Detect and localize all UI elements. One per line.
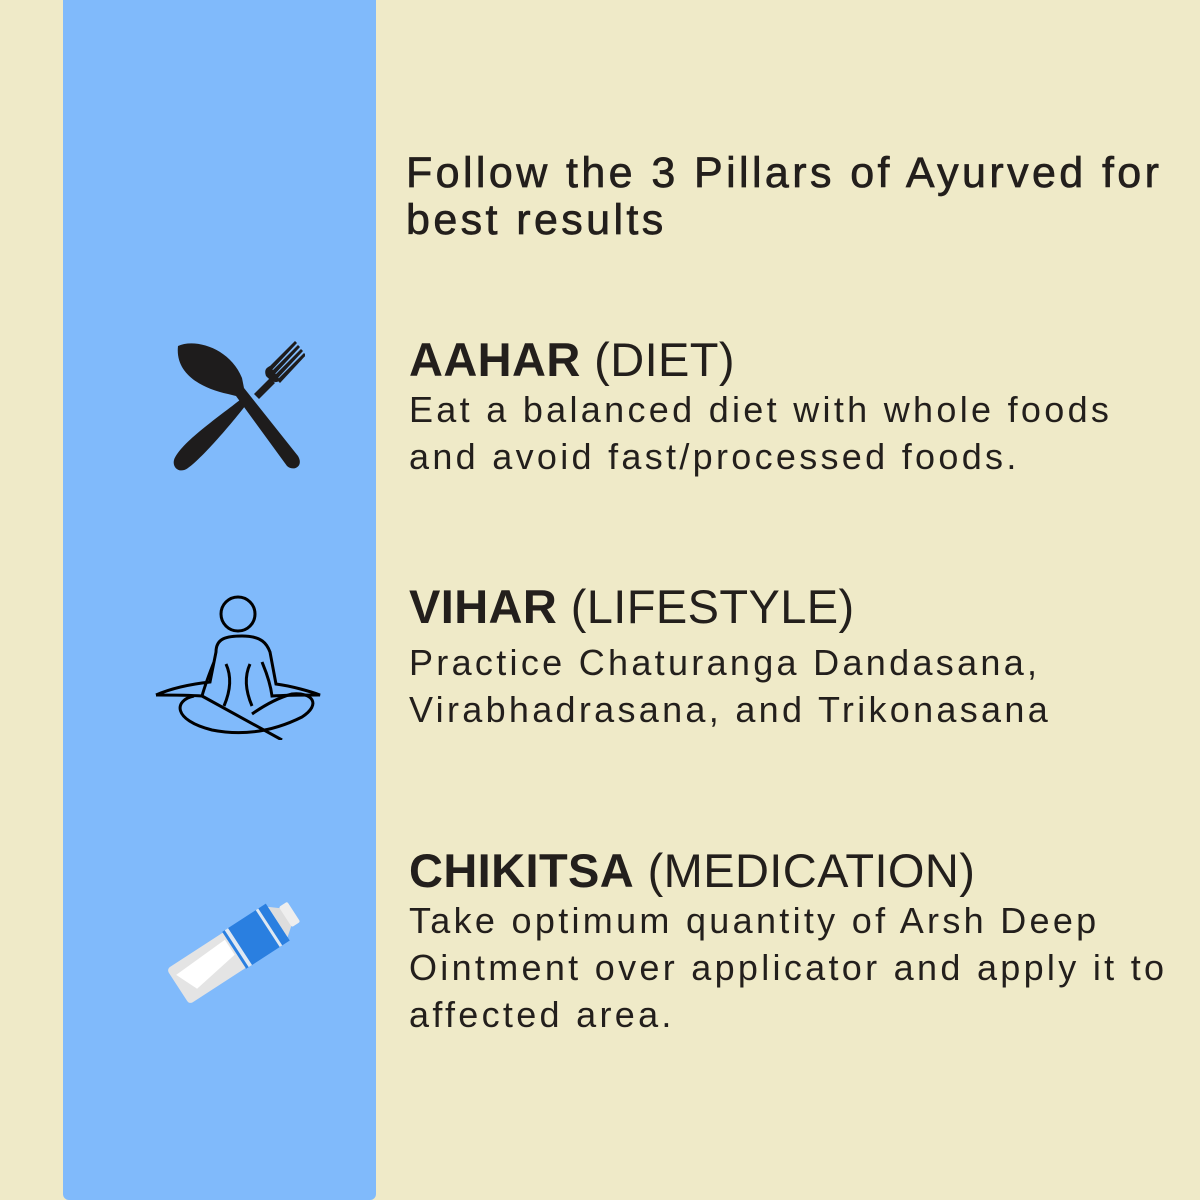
section: vihar: VIHAR (LIFESTYLE) — [409, 580, 855, 633]
section: chikitsa: affected area. — [409, 994, 675, 1035]
icon: meditating person — [155, 596, 320, 740]
icon: ointment tube — [168, 902, 300, 1003]
icon: spoon and fork — [174, 341, 305, 470]
section: aahar: Eat a balanced diet with whole foods — [409, 389, 1112, 430]
section: vihar — [409, 580, 1051, 730]
section: chikitsa — [409, 844, 1167, 1035]
section: aahar — [409, 333, 1112, 477]
blue band — [63, 0, 376, 1200]
section: chikitsa: Ointment over applicator and apply it to — [409, 947, 1167, 988]
title — [406, 149, 1162, 244]
section: vihar: Virabhadrasana, and Trikonasana — [409, 689, 1051, 730]
section: chikitsa: CHIKITSA (MEDICATION) — [409, 844, 975, 897]
title: best results — [406, 196, 667, 244]
section: vihar: Practice Chaturanga Dandasana, — [409, 642, 1040, 683]
section: chikitsa: Take optimum quantity of Arsh Deep — [409, 900, 1100, 941]
title: Follow the 3 Pillars of Ayurved for — [406, 149, 1162, 197]
section: aahar: and avoid fast/processed foods. — [409, 436, 1020, 477]
section: aahar: AAHAR (DIET) — [409, 333, 735, 386]
